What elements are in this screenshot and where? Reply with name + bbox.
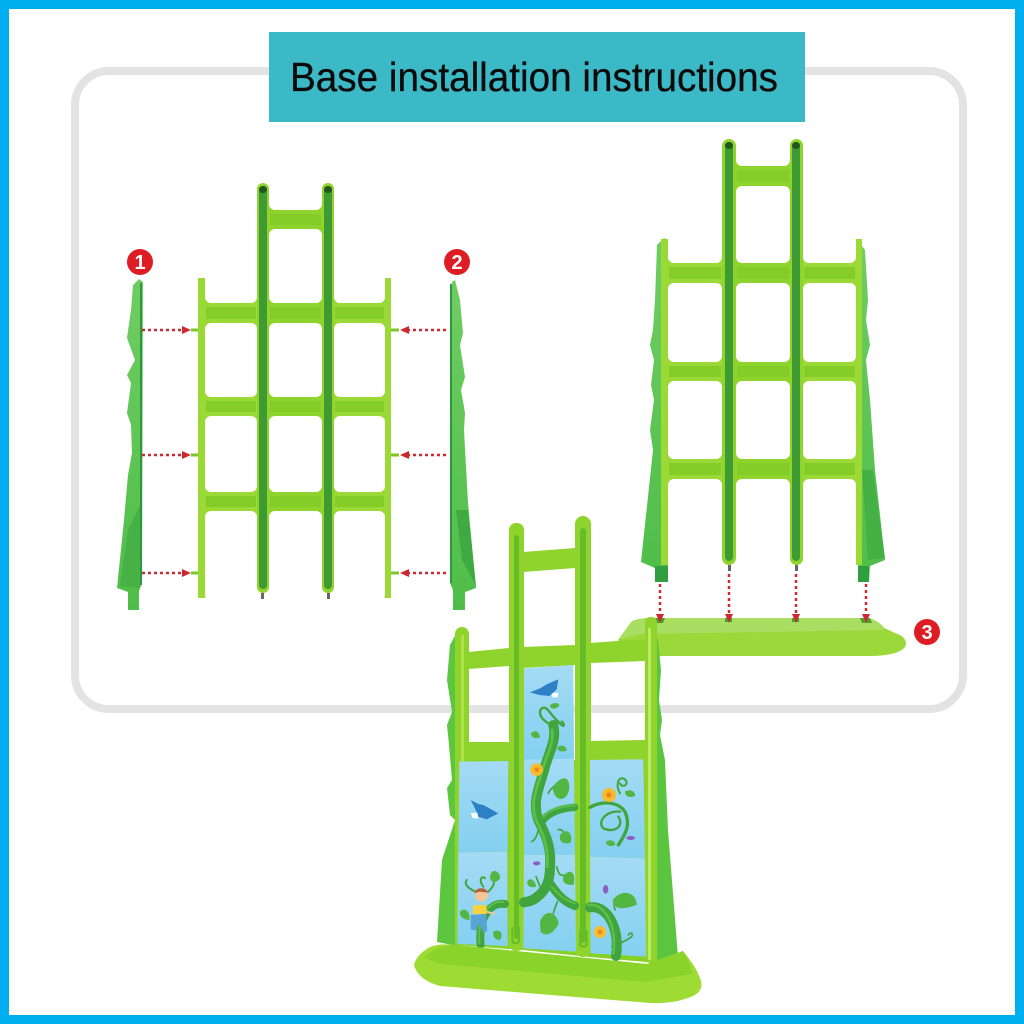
birds [471,679,558,819]
step 1 badge: 1 [134,252,146,274]
assembly arrows down [656,574,870,623]
product base [414,944,701,1003]
right side leaf [856,238,885,582]
step 2 side piece [450,280,476,610]
flowers [530,763,616,938]
step 3 badge [914,619,940,645]
rounded gray panel outline [75,71,963,709]
left side leaf [641,238,668,582]
step 1 badge [127,249,153,275]
title banner [269,32,805,122]
side leaf right [650,617,678,964]
step 3 badge: 3 [921,622,933,644]
beanstalk [466,708,632,956]
title banner: Base installation instructions [290,54,778,100]
purple buds [533,836,635,894]
step 2 badge: 2 [451,252,463,274]
side leaf left [437,630,458,946]
left ladder frame [198,175,393,601]
tile panels and artwork, local coordinates are 3x [457,665,646,957]
boy climbing [471,888,495,932]
right assembled frame [641,130,885,582]
leaves [460,703,637,940]
assembled product [414,516,701,1003]
tile panels [457,665,646,957]
base plate [618,618,906,656]
step 1 side piece [117,279,143,610]
rail foot channels [512,927,587,947]
assembly arrows right [391,326,449,577]
step 2 badge [444,249,470,275]
assembly arrows left [142,326,198,577]
frame body [455,516,657,963]
ladder body [661,130,862,571]
